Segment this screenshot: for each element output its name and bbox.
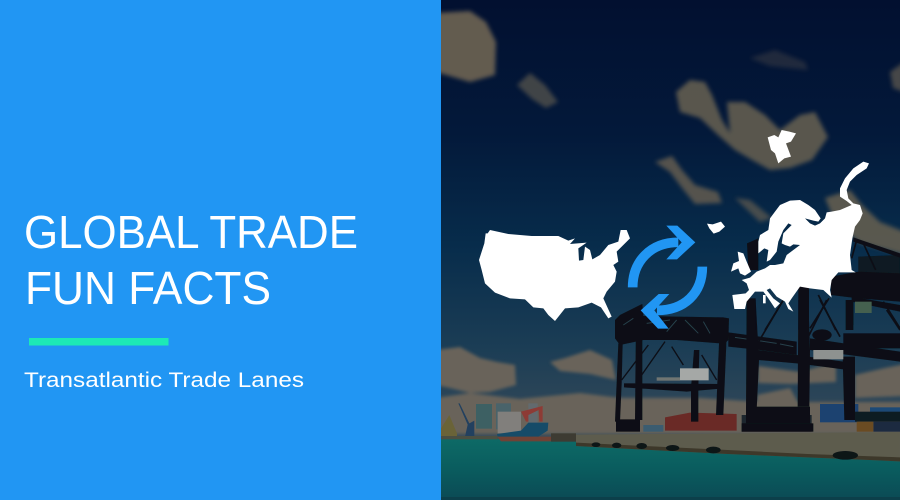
upper crane gantry behind Europe	[747, 237, 900, 330]
map: Svalbard	[768, 130, 796, 163]
truss gaps	[623, 318, 793, 347]
accent bar	[29, 338, 168, 346]
Corsica	[763, 295, 766, 303]
photo bottom edge	[441, 497, 900, 500]
title: FUN FACTS	[25, 262, 271, 314]
containers	[643, 404, 900, 432]
map: contiguous United States	[479, 230, 630, 321]
right crane	[742, 300, 900, 432]
bottom arrow	[641, 267, 702, 329]
subtitle: Transatlantic Trade Lanes	[24, 369, 304, 392]
panel: port photograph	[436, 0, 900, 500]
horizon clouds	[436, 347, 900, 434]
title: GLOBAL TRADE	[24, 206, 358, 258]
panel: blue title panel	[0, 0, 441, 500]
cranes	[615, 300, 900, 432]
map: Iceland	[707, 222, 725, 234]
icon: exchange arrows	[633, 226, 702, 329]
left crane	[615, 304, 843, 432]
Great Britain and Ireland	[731, 252, 751, 276]
top arrow	[633, 226, 695, 287]
mainland and Scandinavia	[732, 162, 869, 312]
title	[24, 206, 358, 314]
map: Europe	[731, 162, 869, 312]
cityscape and ship	[441, 403, 576, 442]
water	[441, 439, 900, 500]
quay wall	[576, 432, 900, 461]
clouds in the sky	[436, 11, 900, 255]
